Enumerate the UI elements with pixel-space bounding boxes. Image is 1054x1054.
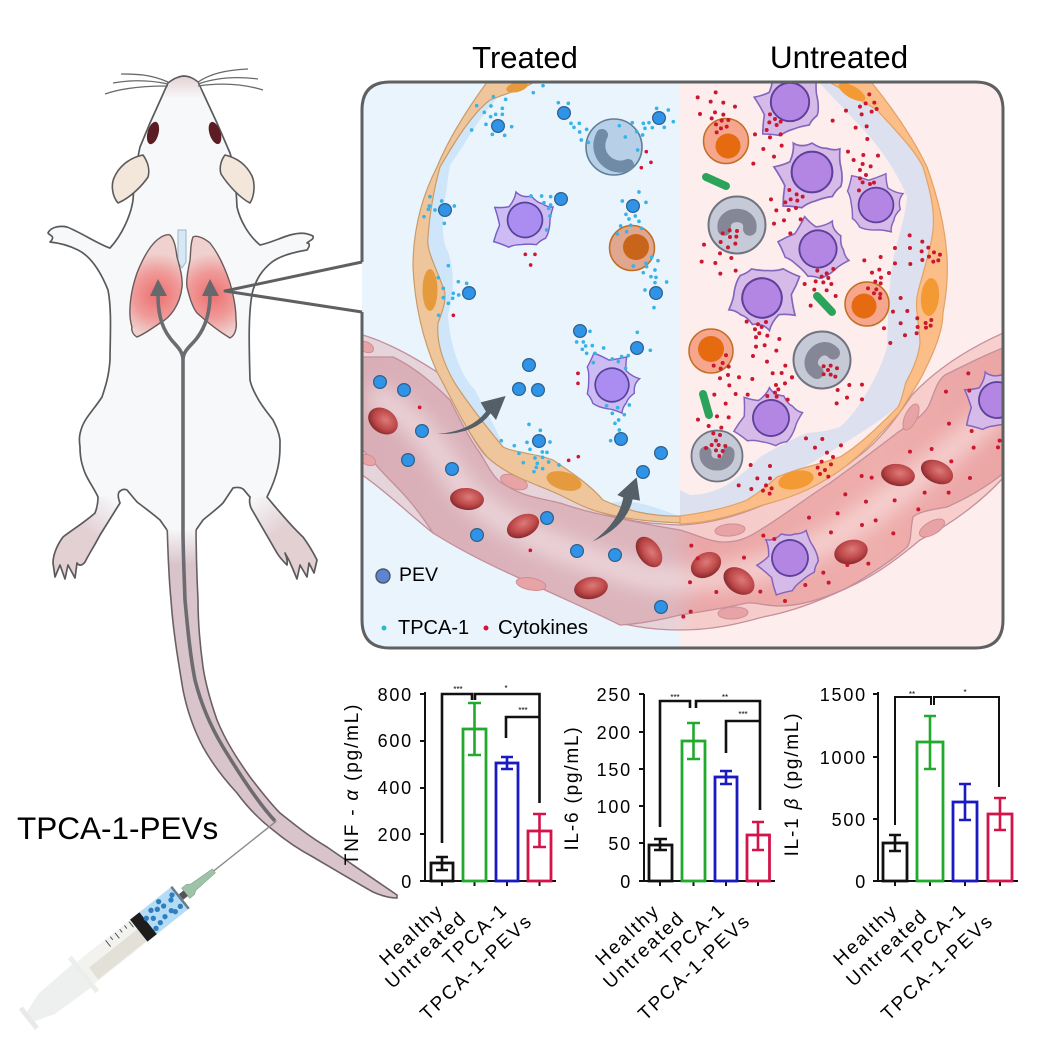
mouse body	[48, 76, 317, 579]
significance brackets: ***	[670, 693, 680, 702]
bars	[649, 741, 770, 881]
y axis and ticks: 1000	[820, 748, 867, 768]
x axis labels: TPCA-1-PEVs	[878, 910, 998, 1025]
PEV particles	[380, 113, 661, 607]
x axis labels: TPCA-1-PEVs	[635, 910, 755, 1025]
y axis and ticks: 400	[378, 778, 413, 798]
label: TPCA-1-PEVs: TPCA-1-PEVs	[17, 810, 218, 846]
tail of mouse	[167, 520, 397, 898]
error bars	[436, 703, 546, 870]
whiskers	[105, 69, 263, 94]
significance brackets: **	[909, 690, 915, 699]
x axis labels: TPCA-1	[898, 899, 971, 970]
significance brackets: ***	[453, 685, 463, 694]
macrophages: treated	[486, 188, 645, 416]
lumen highlight	[370, 395, 1000, 580]
title: Treated: Treated	[472, 40, 578, 75]
x axis labels: Healthy	[830, 900, 902, 970]
alveolar fluid	[425, 78, 936, 520]
icon: mouse ears	[112, 155, 254, 203]
icon: right lung	[187, 236, 236, 338]
y axis and ticks	[378, 685, 556, 892]
red blood cells	[363, 402, 957, 602]
TPCA-1 drug dots	[424, 86, 673, 472]
y axis and ticks	[597, 685, 775, 892]
y axis and ticks: 1500	[820, 685, 867, 705]
arrow: extravasation right	[592, 477, 640, 542]
mouse snout	[163, 77, 204, 98]
y axis and ticks: 0	[620, 872, 632, 892]
significance brackets	[895, 688, 999, 825]
alveolar wall: untreated	[680, 78, 947, 524]
y axis and ticks: 100	[597, 797, 632, 817]
x axis labels: Healthy	[592, 900, 664, 970]
blood vessel wall	[355, 330, 1010, 630]
x axis labels: Untreated	[843, 905, 932, 991]
neutrophils	[586, 119, 862, 482]
vessel wall nuclei	[357, 339, 947, 620]
arrow: vessel path along tail and into lungs	[150, 279, 275, 821]
significance brackets: **	[722, 693, 728, 702]
y axis and ticks: 200	[378, 825, 413, 845]
x axis labels: TPCA-1	[439, 899, 512, 970]
x axis labels: TPCA-1-PEVs	[417, 910, 537, 1025]
significance brackets: *	[504, 684, 508, 693]
alveolar wall: treated	[413, 78, 682, 523]
x axis labels	[830, 899, 998, 1025]
arrow: extravasation left	[437, 396, 506, 434]
significance brackets: ***	[518, 706, 528, 715]
icon: syringe	[13, 804, 290, 1037]
significance brackets	[660, 693, 760, 827]
x axis labels: Untreated	[382, 907, 471, 993]
macrophages: untreated	[725, 75, 1028, 599]
icon: mouse eyes	[145, 120, 224, 146]
y axis and ticks: 0	[855, 872, 867, 892]
panel border	[362, 82, 1003, 648]
y axis and ticks	[820, 685, 1018, 892]
y axis and ticks: 0	[401, 872, 413, 892]
y axis and ticks: 600	[378, 731, 413, 751]
y axis and ticks: 50	[608, 834, 632, 854]
x axis labels: Healthy	[376, 900, 448, 970]
callout lines from lung to panel	[225, 262, 362, 312]
chart: IL-1 beta	[782, 685, 1018, 1025]
x axis labels: TPCA-1	[657, 899, 730, 970]
legend: PEV: PEV	[399, 564, 438, 586]
legend: Cytokines: Cytokines	[498, 616, 588, 639]
icon: trachea	[178, 230, 186, 268]
y axis label: TNF - α (pg/mL)	[342, 703, 363, 865]
bars	[883, 742, 1012, 881]
legend: PEV	[376, 564, 438, 586]
alveolar wall nuclei	[422, 79, 941, 494]
y axis and ticks: 800	[378, 685, 413, 705]
monocytes	[610, 118, 889, 373]
significance brackets: ***	[738, 710, 748, 719]
x axis labels: Untreated	[600, 907, 689, 993]
error bars	[654, 723, 764, 850]
cytokine dots: untreated	[683, 92, 1000, 617]
chart: TNF-alpha	[342, 684, 556, 1025]
significance brackets	[442, 684, 540, 843]
error bars	[889, 716, 1006, 851]
significance brackets: *	[963, 688, 967, 697]
y axis and ticks: 250	[597, 685, 632, 705]
y axis label: IL-1 β (pg/mL)	[782, 712, 803, 856]
y axis and ticks: 200	[597, 723, 632, 743]
x axis labels	[592, 899, 755, 1025]
icon: left lung	[130, 235, 182, 337]
blood vessel lumen	[355, 345, 1010, 625]
cytokine dots: treated	[420, 152, 651, 550]
title: Untreated: Untreated	[770, 39, 908, 75]
bars	[431, 729, 551, 881]
panel: treated vs untreated lung alveolus	[355, 75, 1028, 648]
legend: TPCA-1: TPCA-1	[398, 617, 469, 639]
y axis label: IL-6 (pg/mL)	[562, 725, 583, 851]
chart: IL-6	[562, 685, 775, 1025]
x axis labels	[376, 899, 537, 1025]
y axis and ticks: 150	[597, 760, 632, 780]
bacteria	[703, 177, 832, 415]
y axis and ticks: 500	[832, 810, 867, 830]
